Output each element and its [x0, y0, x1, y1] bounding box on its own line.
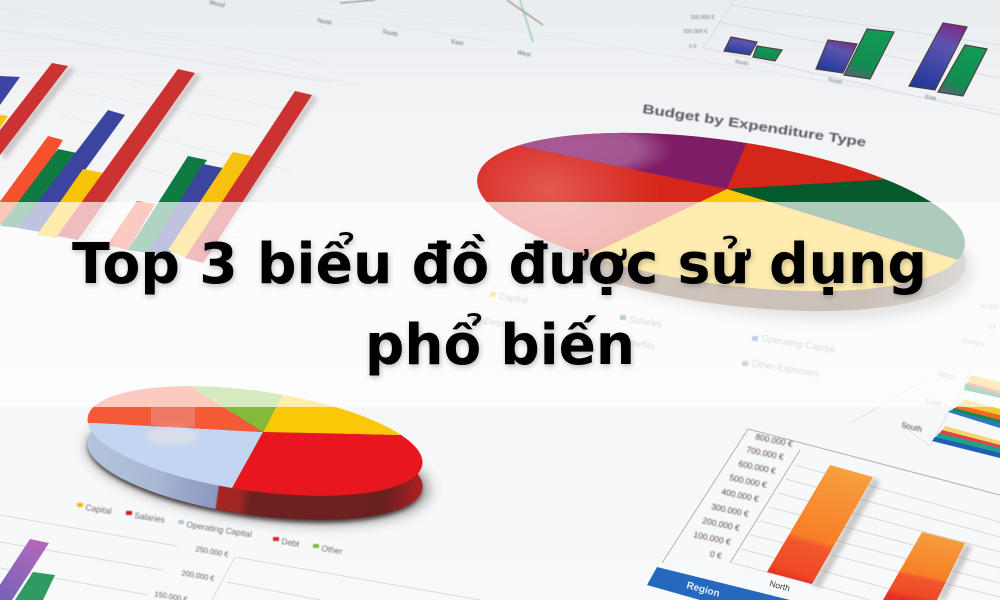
Region header	[647, 567, 790, 600]
bars: East	[948, 399, 1000, 428]
bar chart, left	[0, 10, 360, 263]
horizontal bar chart, right: West	[937, 369, 957, 383]
bar chart, Region	[647, 429, 1000, 600]
chart title: Budget by Expenditure Type	[642, 102, 867, 150]
pie chart: Budget by Expenditure Type	[477, 104, 976, 324]
axis labels: 200.000 €	[702, 515, 741, 533]
small pie legend: Salaries	[134, 510, 166, 525]
axis labels: 800.000 €	[755, 431, 794, 449]
axis labels: 100.000 €	[693, 529, 732, 547]
line chart, top centre: West	[517, 50, 531, 59]
bar chart, top right	[683, 0, 1000, 115]
bar chart, top right: East	[925, 94, 937, 102]
title	[72, 232, 927, 378]
small pie legend: Debt	[281, 536, 301, 549]
line chart, top centre	[0, 0, 1000, 110]
slice: green	[193, 386, 283, 432]
pie legend, faded: Capital	[498, 291, 528, 307]
line chart, top centre: Wood	[209, 0, 225, 9]
horizontal bar chart, right: East	[925, 396, 943, 409]
slice: yellow	[263, 394, 401, 435]
shadows of left bars	[0, 67, 318, 262]
translucent white title band	[0, 202, 1000, 407]
bar chart, top right: South	[828, 77, 843, 86]
pie legend, faded: Benefits	[620, 336, 655, 352]
line chart, top centre: South	[382, 29, 398, 38]
pie legend, faded: Operating Capital	[761, 333, 835, 356]
bar: North	[767, 465, 873, 584]
small pie legend: Operating Capital	[186, 519, 253, 539]
slice: red	[232, 432, 422, 496]
small pie legend: Capital	[85, 502, 112, 516]
title line 2: phổ biến	[365, 313, 635, 378]
axis labels: 0 €	[709, 549, 723, 561]
slice: red right	[727, 143, 886, 189]
pie legend, faded: 0 €	[988, 325, 997, 331]
bar chart, top right: 100.000 €	[683, 29, 707, 35]
bar chart, top right: 0 €	[689, 44, 697, 50]
axis labels: 600.000 €	[738, 458, 777, 476]
bars: South	[932, 426, 1000, 458]
label: Region: Region	[685, 580, 721, 600]
slice: green	[728, 180, 965, 260]
bars: East	[909, 23, 987, 96]
pie legend, faded: Other Expenses	[751, 358, 820, 380]
axis labels: 300.000 €	[711, 501, 750, 519]
bar chart, bottom left	[0, 515, 480, 600]
bar chart, bottom left: 250.000 €	[195, 544, 230, 559]
horizontal bar chart, right	[851, 367, 1000, 458]
small pie legend	[77, 502, 343, 556]
axis labels: 700.000 €	[746, 444, 785, 462]
label: North: North	[768, 578, 791, 593]
axis labels	[693, 431, 794, 561]
bar: second region	[883, 532, 965, 600]
line chart, top centre: East	[451, 39, 464, 48]
bar: green	[15, 572, 55, 600]
axis labels: 400.000 €	[721, 486, 760, 504]
small pie chart	[80, 386, 436, 532]
axis labels: 500.000 €	[729, 472, 768, 490]
bars: West	[964, 375, 1000, 398]
slice: orange	[88, 386, 263, 432]
slice: light blue	[88, 423, 263, 488]
slice: purple	[520, 132, 746, 189]
bar chart, top right: 150.000 €	[690, 15, 714, 21]
slice: yellow	[588, 189, 958, 292]
bar: purple	[0, 539, 49, 600]
bars: North	[724, 37, 782, 61]
title line 1: Top 3 biểu đồ được sử dụng	[72, 232, 927, 297]
bars: South	[816, 29, 894, 79]
slice: red left	[477, 146, 644, 252]
bar shadows	[812, 477, 972, 600]
small pie legend: Other	[321, 543, 343, 556]
bar chart, bottom left: 200.000 €	[181, 568, 216, 583]
pie legend, faded: -50.000 €	[959, 338, 985, 348]
line chart, top centre: North	[317, 18, 332, 27]
pie legend, faded: Salaries	[628, 314, 663, 330]
bar chart, top right: North	[735, 59, 749, 68]
horizontal bar chart, right: South	[901, 420, 923, 434]
pie legend, faded: Debt	[484, 316, 505, 330]
pie legend, faded	[473, 291, 1000, 380]
